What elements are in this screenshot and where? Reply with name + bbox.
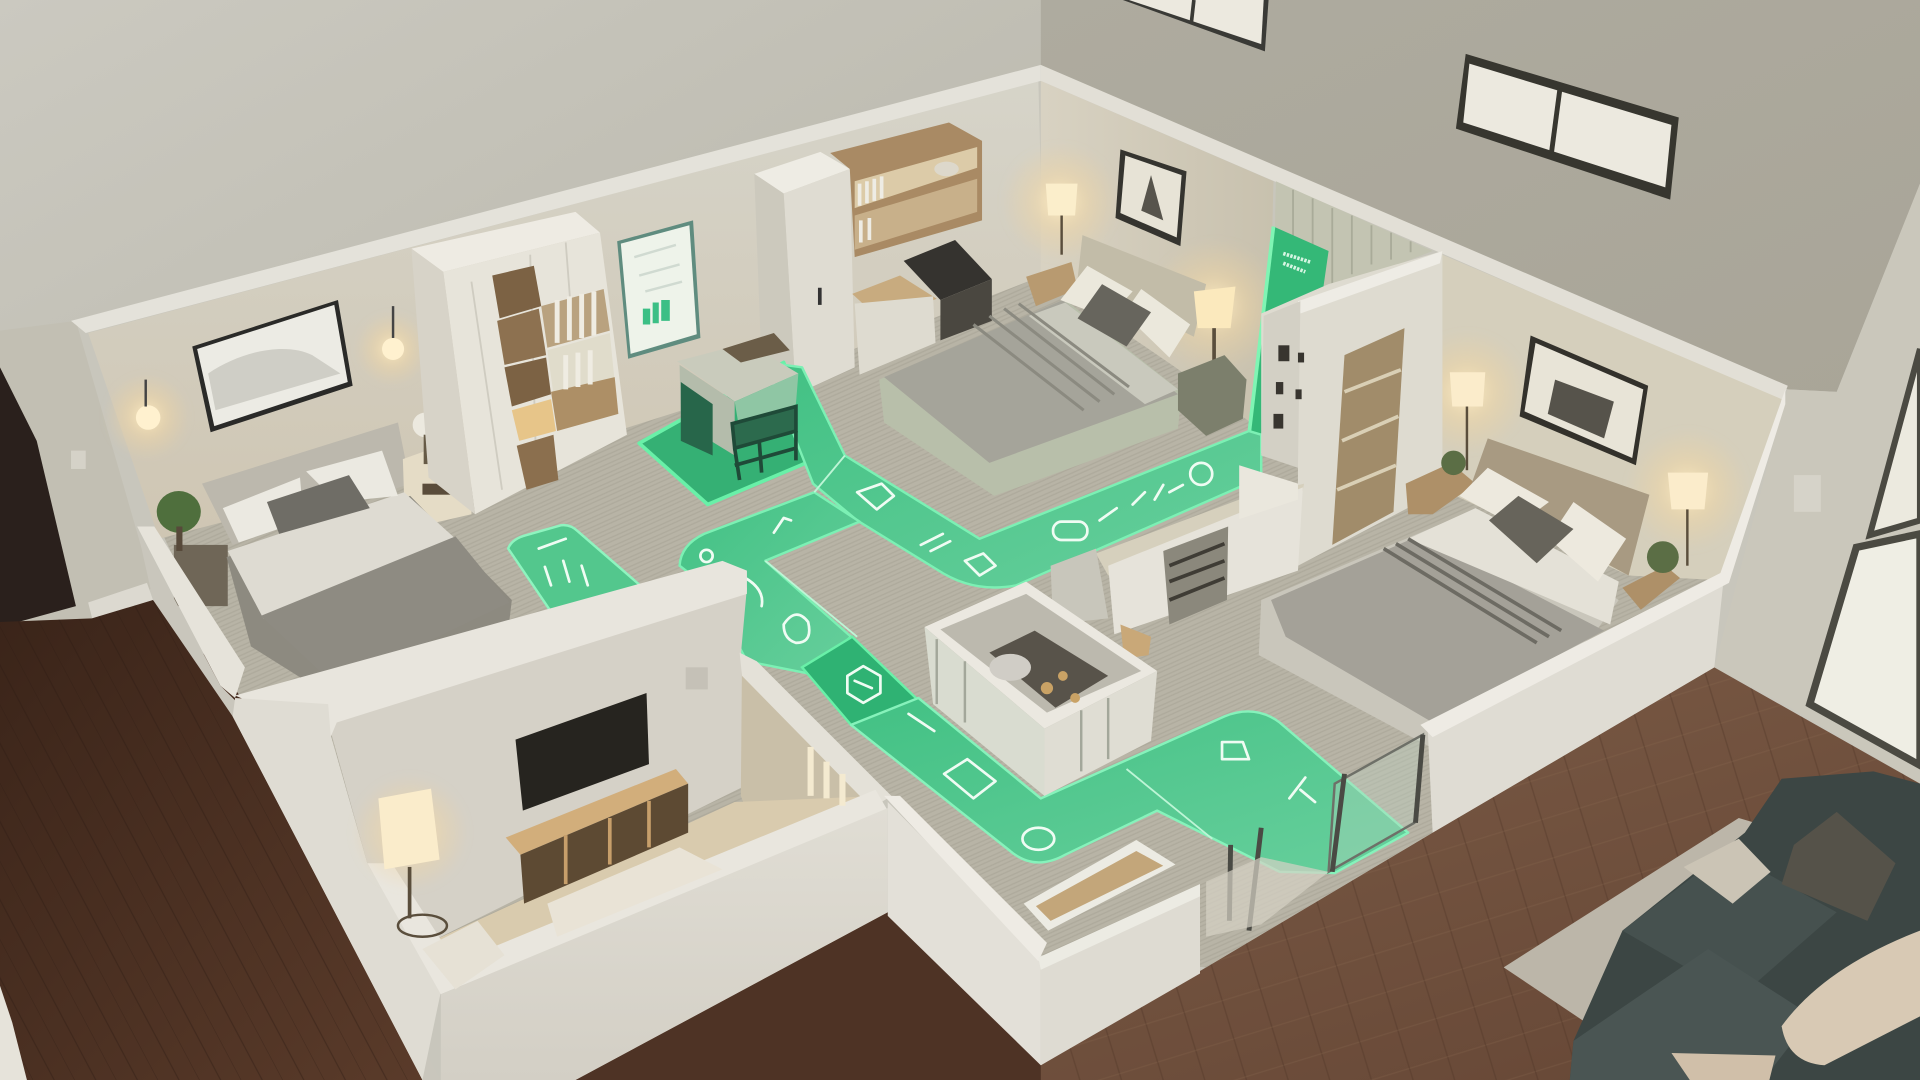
interior carpet floor [159,269,1724,980]
glass railing [1206,735,1423,937]
kitchen counter and stove [852,240,992,375]
desk and chair [677,333,798,480]
lamp right [1668,473,1708,566]
center bedroom [879,149,1247,496]
icon: face tile [965,553,996,576]
corner ledge [884,796,1047,961]
living alcove [741,655,872,845]
pillows [223,451,398,542]
icon: left zone glyphs [539,539,607,600]
rug [1504,818,1788,1022]
living room back wall [328,588,749,943]
large window right [1810,349,1920,765]
nightstand with flowers [403,413,471,524]
alcove front wall [1041,884,1200,1065]
plant and side table [157,491,228,606]
corner wall face [888,802,1041,1065]
media console [506,769,688,904]
path icons [539,463,1315,850]
pillows [1060,266,1190,358]
seat cushion lower [1570,949,1812,1080]
bedroom wall art [1116,149,1187,246]
clerestory window right [1456,54,1679,200]
right bedroom [1259,336,1708,747]
clerestory window top [1123,0,1269,51]
left isolated zone [508,525,643,621]
headboard [1078,235,1206,337]
desk left side [680,365,735,456]
built-in niche shelf [1332,328,1404,545]
sofa base [1570,771,1920,1080]
desk drawer [681,382,713,456]
main corridor [765,362,1261,588]
living floor [429,796,882,986]
icon: shield check [857,484,894,509]
bed linen [1029,302,1178,404]
branch corridor [680,492,860,673]
icon: hook [774,518,791,533]
bed blanket [1271,535,1604,722]
beige pillow [1671,1053,1776,1080]
left outer wall top [137,527,245,698]
kitchen shelves [830,122,982,257]
floor lamp [351,774,469,937]
tall kitchen cabinet [754,152,855,394]
beige throw [1782,931,1920,1065]
right outer wall [1428,576,1724,833]
wall hook [686,667,708,689]
bed frame [1259,512,1619,747]
wall display screen [617,220,700,359]
icon: curve [741,576,762,606]
bed stripes [1384,539,1561,643]
icon: circle face [1022,828,1054,850]
lower dark segment [802,637,918,725]
partition wall with control panel [1261,251,1442,566]
outlet plate [1794,475,1821,512]
left margin highlight [0,986,27,1080]
icon: dash [909,714,934,731]
right outer wall ledge [1420,389,1785,737]
lamp on nightstand [1194,287,1236,365]
slatted wall [1273,181,1433,294]
bed linen [1408,508,1619,624]
lamp left [1450,372,1485,470]
desk right side [735,373,798,431]
television [516,693,649,811]
table lamp left [1046,184,1078,255]
desk top [677,343,798,402]
pillows [1460,468,1626,582]
living sofa [547,847,722,937]
right column wall [1714,184,1920,784]
green path network [508,227,1408,873]
opening rim [1024,840,1176,931]
left bedroom [136,300,512,700]
icon: round button [1190,463,1212,485]
headboard [1469,438,1649,576]
armchair [422,921,504,989]
central box room [924,582,1157,796]
wall ledge left [71,65,1041,333]
nightstand left [1026,262,1078,306]
alcove candles [811,747,842,806]
vertical wall glow strip [1249,227,1329,435]
floor seam lines [765,456,1212,839]
nightstands [1406,451,1680,610]
headboard [202,422,410,545]
sofa [1570,771,1920,1080]
wall sconces [136,306,404,430]
icon: door tab [1222,742,1249,759]
bed frame [879,300,1182,496]
chair frame [732,407,796,480]
living room furniture [351,667,842,989]
wall ledge right [1041,65,1788,402]
interior wall of right room [1442,255,1782,580]
icon: head [784,615,809,643]
icon: stacked layers [847,666,880,703]
alcove ledge [740,653,891,808]
upper right wall [1041,0,1920,392]
bed base [227,496,512,700]
icon: arrows [921,534,950,551]
bookshelf cabinet [411,212,627,514]
left outer wall face [137,529,441,1080]
interior back wall left [88,81,1043,539]
seat cushion upper [1622,851,1837,998]
upper left wall [0,0,1043,343]
bedroom wall art [1520,336,1648,465]
wood floor right [576,667,1920,1080]
nightstand right [1178,355,1247,436]
bed blanket top [228,492,456,618]
opening with wooden stairs [1036,851,1163,921]
outer left wall and doorway [0,321,153,627]
wall art [192,300,353,432]
icon: ticket [944,759,996,798]
lamp glows [104,143,1749,551]
wall control icons [1273,345,1304,429]
icon: dashes [1100,485,1183,520]
long wall ledge [235,561,747,737]
kitchen island [1051,465,1304,659]
living front wall face [441,808,888,1080]
living room left wall [233,698,441,1080]
icon: small circle [700,550,713,562]
bed throw [261,536,509,686]
wood floor left [0,600,422,1080]
icon: rounded badge [1053,522,1087,540]
icon: fork [1289,778,1315,802]
desk zone [639,362,818,504]
bed stripes [973,304,1129,410]
bed blanket [884,300,1178,463]
foreground walls [137,389,1821,1080]
dark cushion [1782,812,1896,921]
throw blanket [1684,839,1771,904]
lower corridor [851,698,1408,873]
living front wall ledge [367,790,888,994]
interior back wall right [1041,81,1273,435]
desk organiser [722,333,790,362]
